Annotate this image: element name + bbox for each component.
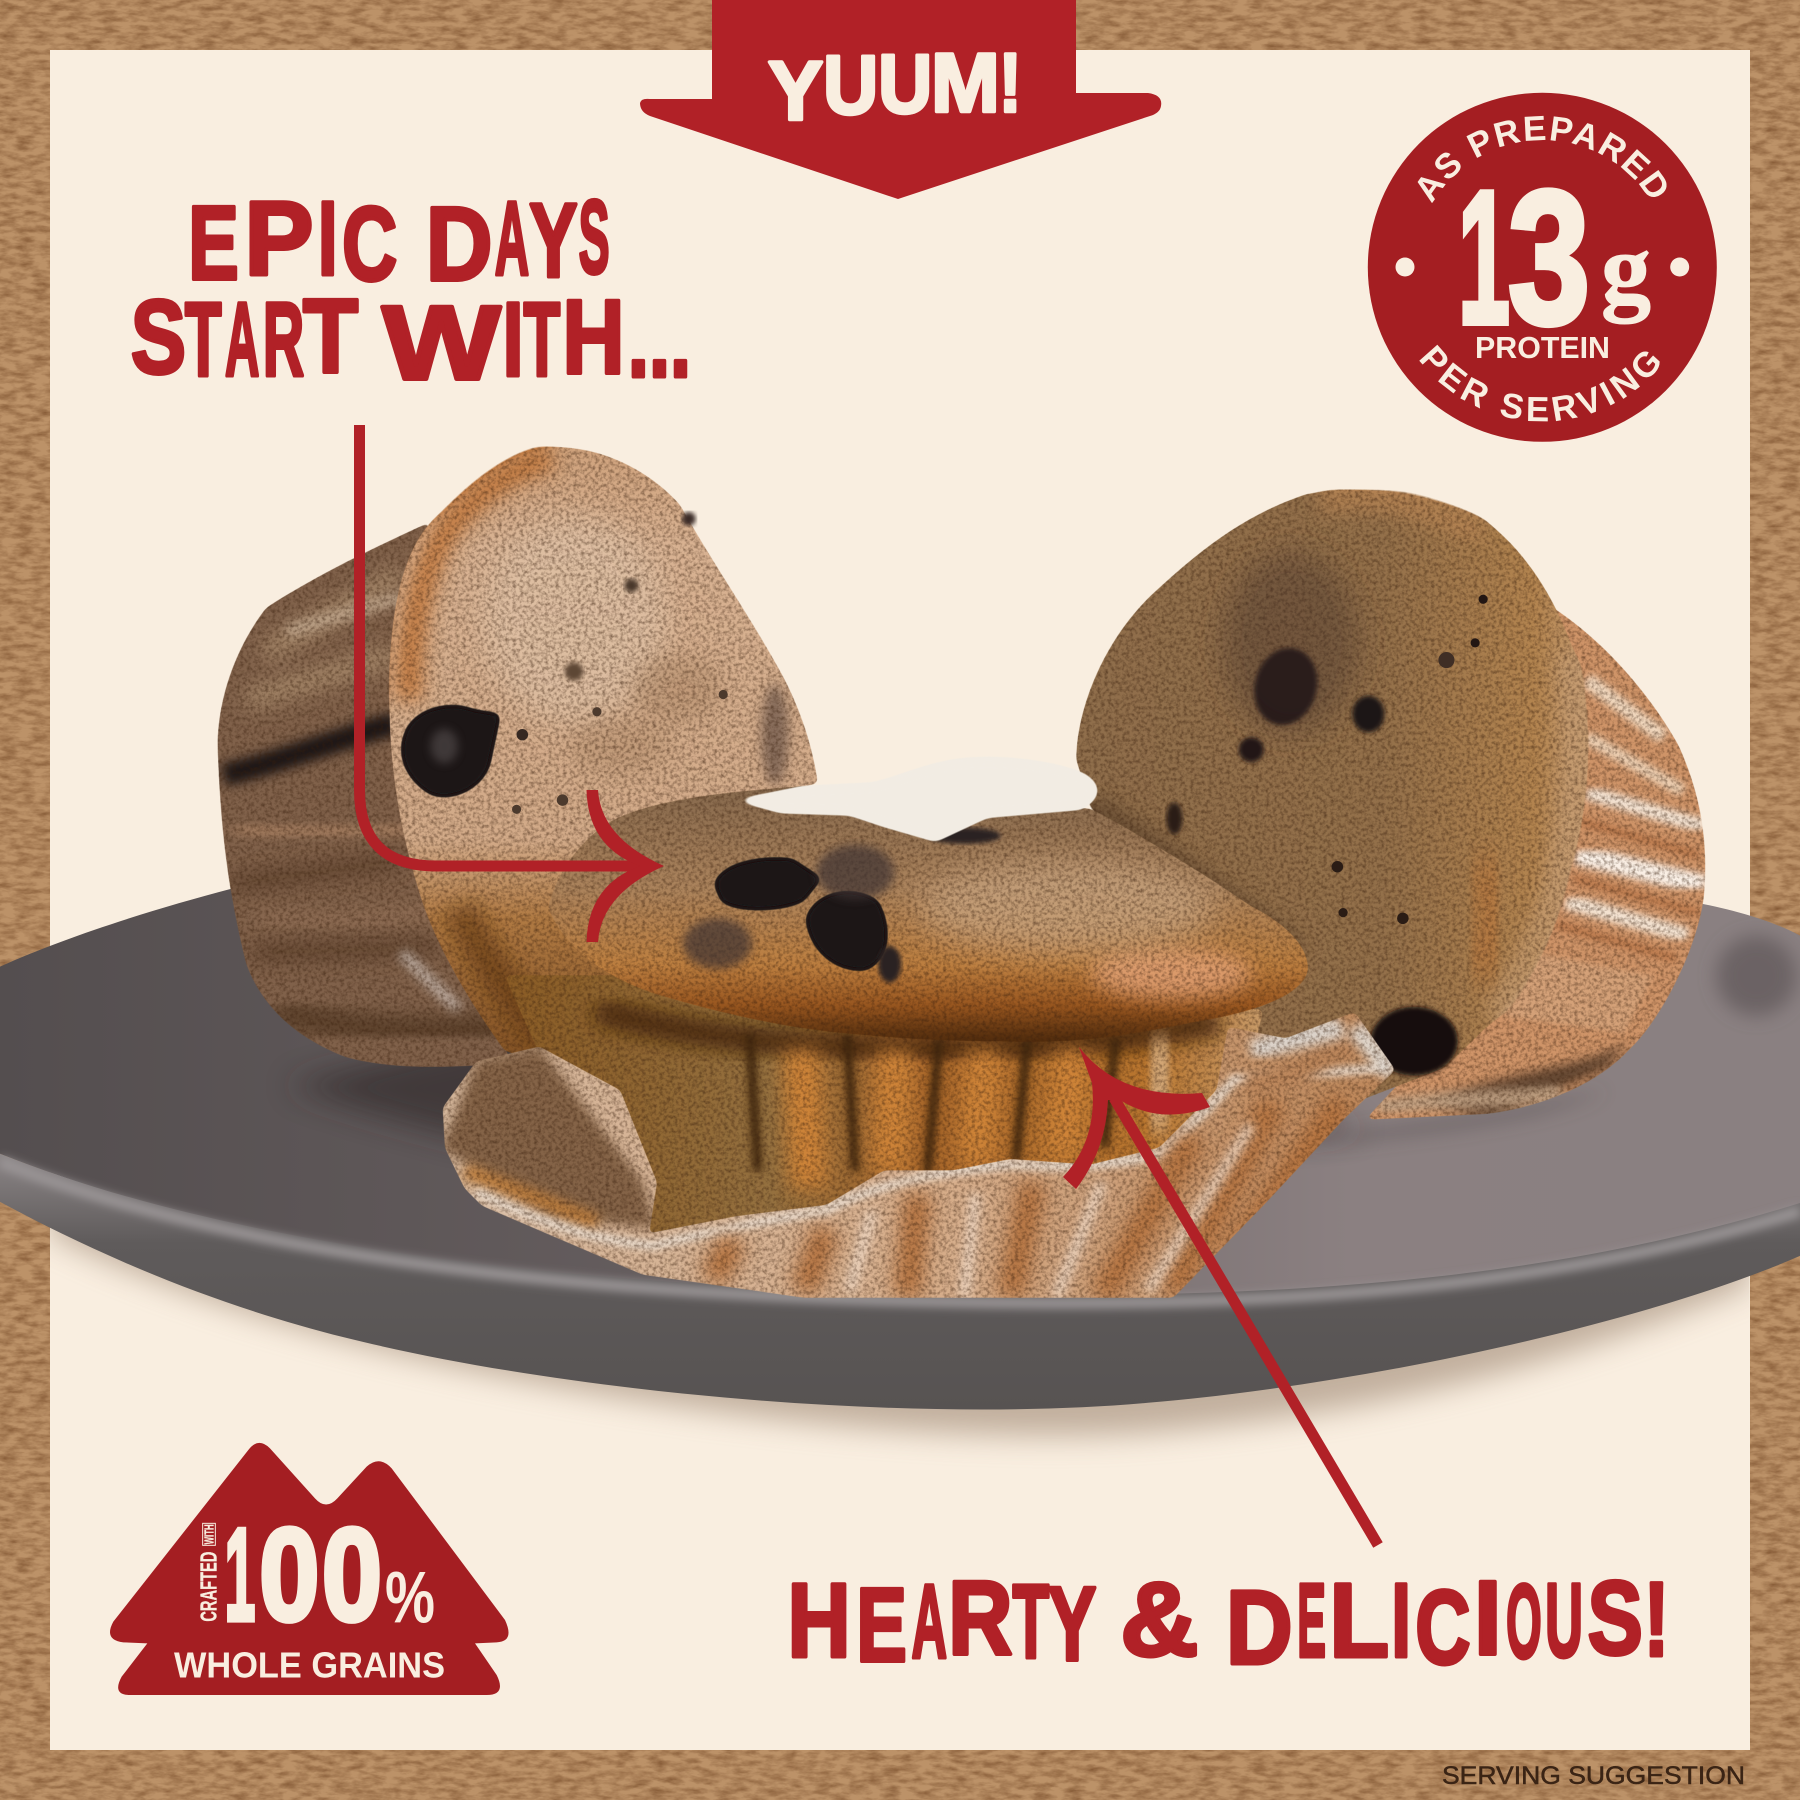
- arrow: epic days pointing to muffin: [360, 425, 664, 942]
- muffin: right, paper cup: [1366, 606, 1705, 1119]
- heading: epic days start with: I: [318, 180, 338, 297]
- muffin: centre, base: [505, 976, 1263, 1234]
- label with: [201, 1523, 216, 1545]
- heading: epic days start with: Y: [529, 183, 577, 300]
- badge arc text bottom: PER SERVING: [1419, 344, 1660, 422]
- muffin: left, paper cup: [218, 522, 511, 1066]
- heading: epic days start with: S: [579, 179, 610, 296]
- label with: WITH: [201, 1524, 216, 1544]
- banner text: U: [823, 38, 878, 132]
- plate shadow: [49, 1205, 1749, 1436]
- badge dots: [1396, 258, 1689, 276]
- heading: hearty and delicious: A: [911, 1564, 947, 1681]
- heading: epic days start with: S: [131, 279, 186, 396]
- number 100: 0: [259, 1501, 319, 1648]
- banner text: M: [931, 35, 1000, 129]
- banner text: Y: [768, 43, 823, 137]
- label whole grains: WHOLE GRAINS: [174, 1645, 445, 1685]
- heading: hearty and delicious: &: [1120, 1561, 1198, 1678]
- heading: epic days start with: H: [563, 279, 624, 396]
- heading: epic days start with: T: [185, 281, 222, 398]
- heading: epic days start with: W: [382, 285, 501, 402]
- heading: hearty and delicious: D: [1226, 1569, 1293, 1686]
- label crafted: CRAFTED: [196, 1552, 222, 1622]
- heading: hearty and delicious: L: [1329, 1563, 1389, 1680]
- heading: epic days start with: A: [495, 180, 529, 297]
- heading: hearty and delicious: !: [1644, 1561, 1669, 1678]
- arrow: hearty and delicious pointing to muffin: [1063, 1047, 1378, 1545]
- number 100: 1: [225, 1501, 255, 1648]
- blueberries: right muffin: [1166, 551, 1488, 1076]
- heading: hearty and delicious: E: [1297, 1563, 1326, 1680]
- heading: hearty and delicious: O: [1506, 1564, 1542, 1681]
- heading: epic days start with: T: [523, 281, 560, 398]
- heading: hearty and delicious: I: [1391, 1563, 1411, 1680]
- heading: hearty and delicious: H: [788, 1563, 851, 1680]
- photo: three muffins on a grey plate: [0, 448, 1800, 1436]
- footnote: serving suggestion: SERVING SUGGESTION: [1442, 1762, 1745, 1790]
- muffin: centre, baked top: [549, 786, 1308, 1041]
- heading: epic days start with: I: [503, 281, 523, 398]
- banner text: !: [999, 35, 1022, 129]
- blueberry: left muffin: [402, 512, 728, 814]
- number 100: 0: [322, 1501, 382, 1648]
- heading: epic days start with: T: [303, 278, 358, 395]
- badge: 13g protein per serving: [1368, 92, 1717, 442]
- badge number: 1: [1458, 152, 1510, 364]
- heading: hearty and delicious: C: [1415, 1569, 1471, 1686]
- percent sign: %: [385, 1557, 435, 1639]
- frosting: [735, 757, 1097, 841]
- badge number: 3: [1508, 152, 1590, 364]
- banner text: U: [878, 37, 932, 131]
- heading: epic days start with: ...: [628, 283, 691, 400]
- heading: epic days start with: R: [263, 281, 304, 398]
- plate: [0, 886, 1800, 1409]
- badge label protein: PROTEIN: [1475, 330, 1610, 365]
- heading: hearty and delicious: U: [1545, 1563, 1583, 1680]
- badge unit g: g: [1601, 213, 1651, 324]
- heading: hearty and delicious: S: [1588, 1560, 1643, 1677]
- muffin: right, top face: [1077, 493, 1585, 1102]
- badge: 100% whole grains mountain: [110, 1443, 509, 1695]
- muffin: left, top face: [390, 448, 817, 1102]
- blueberries: centre muffin: [683, 828, 1001, 983]
- heading: epic days start with: C: [342, 186, 397, 303]
- heading: hearty and delicious: T: [1013, 1564, 1049, 1681]
- heading: epic days start with: E: [188, 185, 239, 302]
- heading: epic days start with: P: [245, 180, 313, 297]
- heading: hearty and delicious: Y: [1048, 1566, 1096, 1683]
- heading: hearty and delicious: I: [1474, 1560, 1502, 1677]
- banner: yuum arrow: [640, 0, 1161, 199]
- heading: hearty and delicious: E: [856, 1567, 907, 1684]
- heading: epic days start with: A: [225, 281, 259, 398]
- heading: hearty and delicious: R: [948, 1560, 1013, 1677]
- heading: epic days start with: D: [426, 186, 492, 303]
- badge arc text top: AS PREPARED: [1418, 116, 1666, 203]
- paper wrapper: centre muffin: [442, 1013, 1395, 1297]
